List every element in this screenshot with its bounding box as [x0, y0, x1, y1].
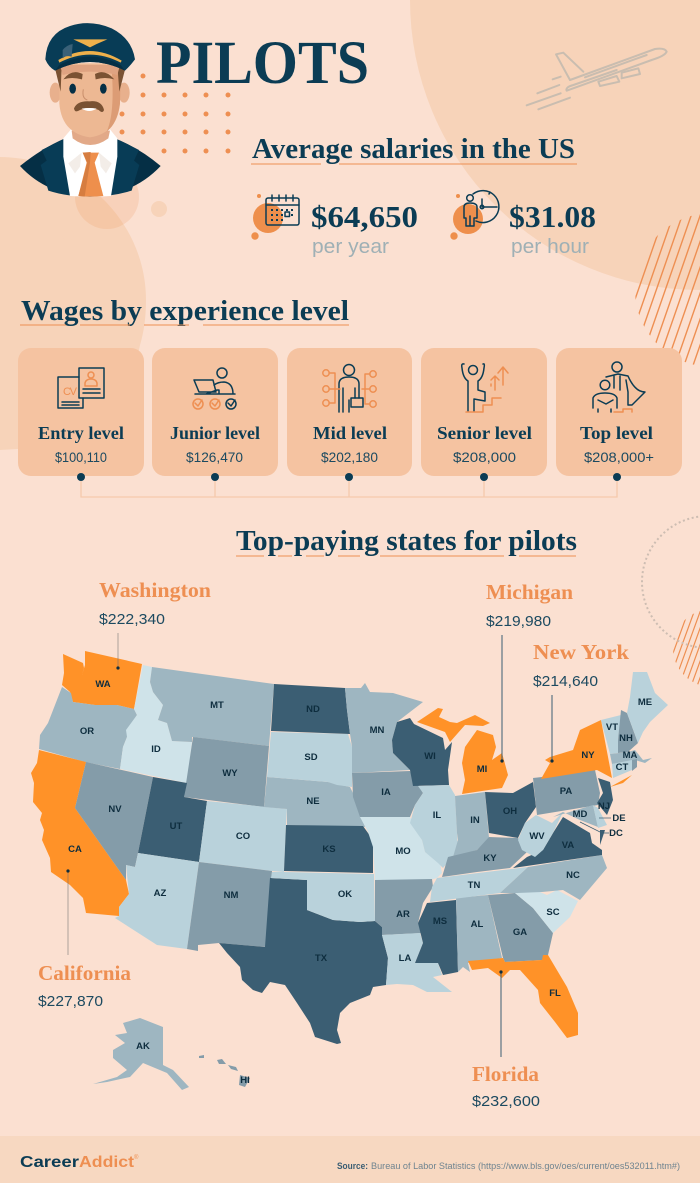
callout: California: $227,870 — [38, 993, 103, 1010]
state: LA: LA — [399, 953, 411, 964]
icon: pilot portrait — [20, 23, 161, 197]
state: OH — [485, 782, 536, 838]
stat: yearly salary — [311, 199, 418, 258]
panel: top level — [556, 348, 682, 481]
chart: US map — [31, 651, 668, 1090]
state: KS — [284, 825, 373, 873]
state: VA: VA — [562, 840, 574, 851]
source note: Source: — [337, 1161, 368, 1172]
panel: senior level: Senior level — [437, 423, 532, 443]
logo: CareerAddict: ® — [134, 1154, 139, 1161]
state: WY — [184, 737, 269, 807]
state: IN — [453, 792, 489, 857]
state: WY: WY — [222, 768, 238, 779]
state: NY: NY — [581, 750, 595, 761]
state: IL — [410, 785, 458, 868]
state: IA — [352, 771, 423, 817]
callout: Florida: Florida — [472, 1062, 540, 1086]
state: NJ — [597, 778, 613, 815]
heading: average salaries: Average salaries in the US — [252, 133, 575, 165]
state: VT — [601, 715, 621, 754]
state: MT: MT — [210, 700, 224, 711]
state: KS: KS — [322, 844, 336, 855]
panel: entry level — [18, 348, 144, 481]
state: ND — [271, 684, 350, 734]
state: OR: OR — [80, 726, 94, 737]
state: SD: SD — [304, 752, 318, 763]
state: CO: CO — [236, 831, 250, 842]
state: TN — [430, 867, 528, 902]
state: NV: NV — [108, 804, 122, 815]
title: PILOTS — [156, 30, 369, 97]
state: DE — [593, 805, 607, 828]
state: SD — [267, 732, 352, 787]
state: TX: TX — [315, 953, 328, 964]
state: WV: WV — [529, 831, 545, 842]
state: ND: ND — [306, 704, 320, 715]
state: NY — [541, 720, 632, 787]
state: AL — [456, 895, 502, 972]
heading: top-paying states: Top-paying states for pilots — [236, 525, 577, 557]
state: IL: IL — [433, 810, 441, 821]
callout: California — [38, 869, 131, 1010]
state: WV — [518, 812, 563, 857]
state: KY: KY — [483, 853, 497, 864]
icon: person climbing steps — [462, 364, 508, 412]
state: MA: MA — [623, 750, 638, 761]
state: MN: MN — [370, 725, 385, 736]
state: IA: IA — [381, 787, 391, 798]
state: WA: WA — [95, 679, 111, 690]
state: CA: CA — [68, 844, 82, 855]
state: MI: MI — [477, 764, 487, 775]
state: SC: SC — [546, 907, 560, 918]
state: FL — [468, 955, 578, 1038]
state: MO: MO — [395, 846, 411, 857]
source note: Bureau of Labor Statistics (https://www.bls.gov/oes/current/oes532011.htm#) — [371, 1161, 680, 1172]
state: AK: AK — [136, 1041, 150, 1052]
panel: mid level: Mid level — [313, 423, 387, 443]
footer — [0, 1136, 700, 1183]
state: NM: NM — [224, 890, 238, 901]
panel: entry level: Entry level — [38, 423, 124, 443]
state: AZ — [115, 853, 199, 949]
state: CT: CT — [616, 762, 629, 773]
state: OK: OK — [338, 889, 352, 900]
state: NV — [75, 762, 153, 880]
icon: person at laptop — [193, 368, 236, 409]
logo: CareerAddict — [20, 1154, 139, 1171]
state: MS: MS — [433, 916, 447, 927]
callout: New York: $214,640 — [533, 673, 598, 690]
state: NH — [618, 710, 638, 753]
icon: person with network — [323, 364, 376, 412]
state: NH: NH — [619, 733, 633, 744]
panel: junior level: $126,470 — [186, 449, 243, 465]
state: ME: ME — [638, 697, 652, 708]
state: VA — [513, 817, 602, 868]
state: ID — [120, 665, 192, 783]
panel: mid level: $202,180 — [321, 449, 378, 465]
state: OR — [39, 687, 137, 769]
connector lines — [81, 477, 617, 497]
state: OK — [271, 872, 375, 922]
callout: New York — [533, 640, 629, 763]
state: ID: ID — [151, 744, 161, 755]
panel: junior level — [152, 348, 278, 481]
state: MD — [553, 805, 598, 827]
panel: top level: Top level — [580, 423, 653, 443]
panel: senior level — [421, 348, 547, 481]
callout: Washington: Washington — [99, 578, 211, 602]
state: WI: WI — [424, 751, 436, 762]
icon: calendar — [251, 194, 299, 240]
state: AK — [93, 1018, 189, 1090]
state: NE: NE — [306, 796, 320, 807]
state: NC — [500, 855, 607, 900]
state: NJ: NJ — [598, 801, 610, 812]
state: DC area — [600, 830, 605, 845]
state: MI — [417, 708, 508, 794]
icon: cv documents: CV — [63, 386, 78, 398]
label: DC — [580, 822, 623, 839]
state: PA: PA — [560, 786, 572, 797]
logo: CareerAddict: Career — [20, 1154, 79, 1171]
label: DC: DC — [609, 828, 623, 839]
state: MS — [415, 900, 458, 975]
state: GA — [488, 893, 553, 962]
state: GA: GA — [513, 927, 527, 938]
panel: senior level: $208,000 — [453, 449, 516, 465]
callout: Florida — [472, 970, 540, 1110]
state: UT — [138, 777, 207, 862]
logo: CareerAddict: Addict — [79, 1154, 135, 1171]
callout: Michigan: Michigan — [486, 580, 573, 604]
state: VT: VT — [606, 722, 618, 733]
icon: boss with cape — [593, 362, 645, 412]
state: KY — [442, 837, 527, 877]
callout: New York: New York — [533, 640, 629, 664]
state: CT — [612, 760, 632, 778]
stat: hourly salary — [509, 199, 596, 258]
state: CO — [199, 801, 287, 872]
state: TN: TN — [468, 880, 480, 891]
panel: top level: $208,000+ — [584, 449, 654, 465]
stat: yearly salary: per year — [312, 236, 389, 258]
dot grid — [120, 74, 230, 154]
panel: junior level: Junior level — [170, 423, 260, 443]
callout: Washington — [99, 578, 211, 670]
state: MA — [610, 750, 652, 764]
state: UT: UT — [170, 821, 183, 832]
heading: wages by experience: Wages by experience level — [21, 295, 349, 327]
state: AR: AR — [396, 909, 410, 920]
state: ME — [627, 672, 668, 743]
panel: entry level: $100,110 — [55, 449, 107, 465]
state: FL: FL — [549, 988, 561, 999]
stat: hourly salary: $31.08 — [509, 199, 596, 234]
state: AR — [375, 879, 433, 935]
stat: hourly salary: per hour — [511, 236, 589, 258]
state: HI: HI — [240, 1075, 250, 1086]
state: TX — [219, 878, 388, 1044]
state: MN — [345, 683, 423, 773]
icon: airplane — [527, 49, 667, 109]
state: NC: NC — [566, 870, 580, 881]
callout: Michigan — [486, 580, 573, 763]
state: OH: OH — [503, 806, 517, 817]
callout: Florida: $232,600 — [472, 1093, 540, 1110]
stat: yearly salary: $64,650 — [311, 199, 418, 234]
state: SC — [515, 887, 578, 933]
state: AZ: AZ — [154, 888, 167, 899]
label: DE — [599, 813, 626, 824]
state: MO — [360, 817, 442, 880]
state: WA — [62, 651, 142, 709]
state: MD: MD — [573, 809, 588, 820]
icon: clock and person — [450, 191, 499, 240]
state: LA — [382, 933, 452, 992]
state: CA — [31, 750, 129, 916]
callout: Michigan: $219,980 — [486, 613, 551, 630]
state: PA — [533, 770, 600, 815]
state: AL: AL — [471, 919, 484, 930]
state: NM — [187, 862, 272, 951]
callout: Washington: $222,340 — [99, 611, 165, 628]
state: WI — [392, 718, 452, 786]
state: MT — [150, 667, 274, 746]
panel: mid level — [287, 348, 412, 481]
label: DE: DE — [612, 813, 626, 824]
state: HI — [199, 1055, 250, 1087]
state: NE — [264, 777, 365, 827]
state: IN: IN — [470, 815, 480, 826]
state: RI — [632, 759, 637, 771]
callout: California: California — [38, 961, 131, 985]
